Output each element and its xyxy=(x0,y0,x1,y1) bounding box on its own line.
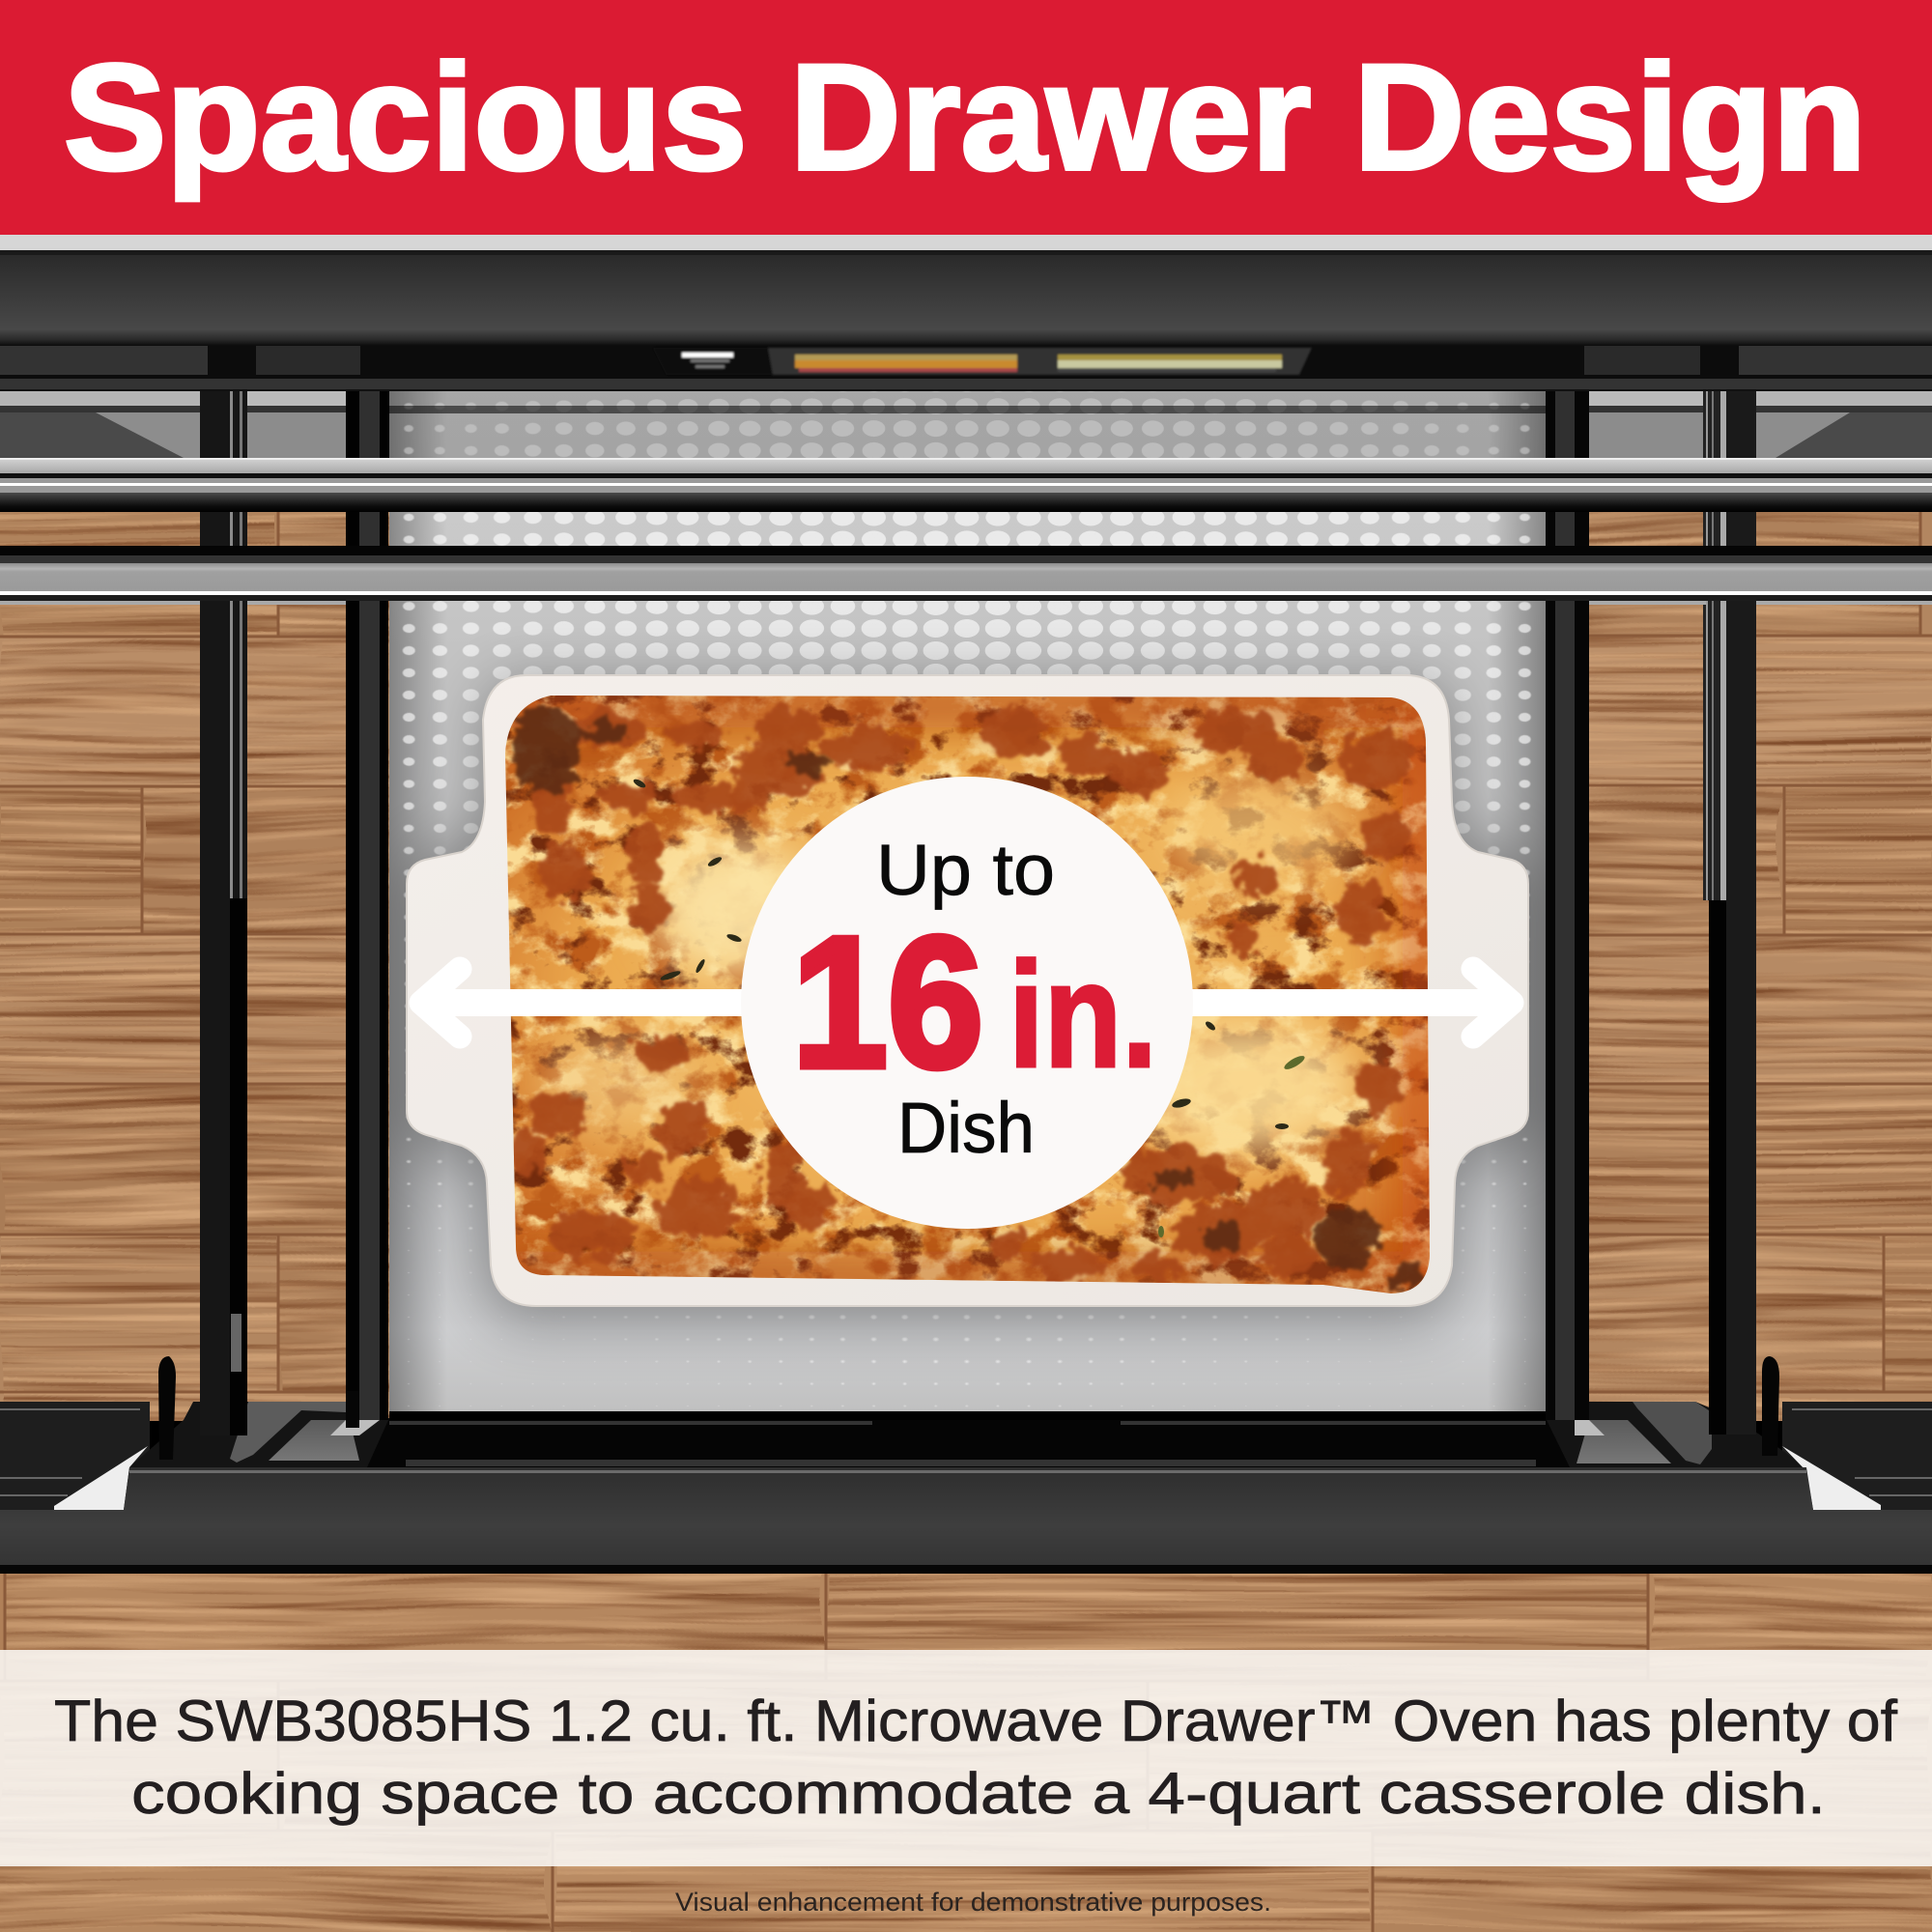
drawer side posts xyxy=(200,391,1756,1435)
wood floor below the drawer xyxy=(0,1573,1932,1932)
oven cavity back wall with halftone dots xyxy=(389,391,1546,1412)
left handle xyxy=(158,1356,176,1460)
herb flecks xyxy=(632,778,1306,1237)
soft tonal areas xyxy=(497,691,1439,1299)
left metal sheet xyxy=(230,1402,346,1463)
description band xyxy=(0,1650,1932,1866)
left white rail xyxy=(54,1446,148,1510)
right tray base xyxy=(1546,1402,1806,1467)
dish shadow xyxy=(406,681,1536,1323)
control screen xyxy=(653,348,1312,375)
wood wall background xyxy=(0,512,1932,1421)
baking dish with lasagna xyxy=(406,675,1536,1323)
right metal sheet xyxy=(1577,1420,1671,1463)
lasagna xyxy=(497,686,1439,1304)
top oven panel and rails xyxy=(0,235,1932,605)
inner left post xyxy=(346,391,388,1420)
callout circle: 16 in. dish xyxy=(741,777,1193,1229)
dark charred spots xyxy=(512,704,1425,1287)
browned cheese blotches xyxy=(507,706,1411,1283)
dish label: Dish xyxy=(897,1088,1035,1168)
in. unit: in. xyxy=(1009,931,1157,1098)
title banner xyxy=(0,0,1932,235)
dish body and handles xyxy=(407,675,1528,1306)
drawer tray and front xyxy=(0,1356,1932,1574)
outer right post xyxy=(1726,391,1756,1435)
glass reflections at right of the upper door xyxy=(1589,391,1932,459)
16 number: 16 xyxy=(792,897,983,1106)
description text: The SWB3085HS 1.2 cu. ft. Microwave Drawer™ Oven has plenty of xyxy=(54,1689,1897,1753)
footnote: Visual enhancement for demonstrative purposes. xyxy=(675,1888,1271,1917)
right side drawer body xyxy=(1782,1402,1932,1510)
outer left post xyxy=(200,391,247,1435)
up to label: Up to xyxy=(876,830,1055,910)
size arrow xyxy=(411,969,1521,1037)
right handle xyxy=(1762,1356,1779,1456)
description text: cooking space to accommodate a 4-quart casserole dish. xyxy=(131,1761,1826,1826)
left tray base xyxy=(129,1402,389,1467)
glass reflections at left of the upper door xyxy=(0,391,346,459)
left side drawer body xyxy=(0,1402,150,1510)
front panel xyxy=(0,1467,1932,1565)
inner right post xyxy=(1546,391,1589,1420)
right white rail xyxy=(1782,1446,1881,1510)
inner well xyxy=(367,1418,1570,1467)
title: Spacious Drawer Design xyxy=(64,34,1866,202)
